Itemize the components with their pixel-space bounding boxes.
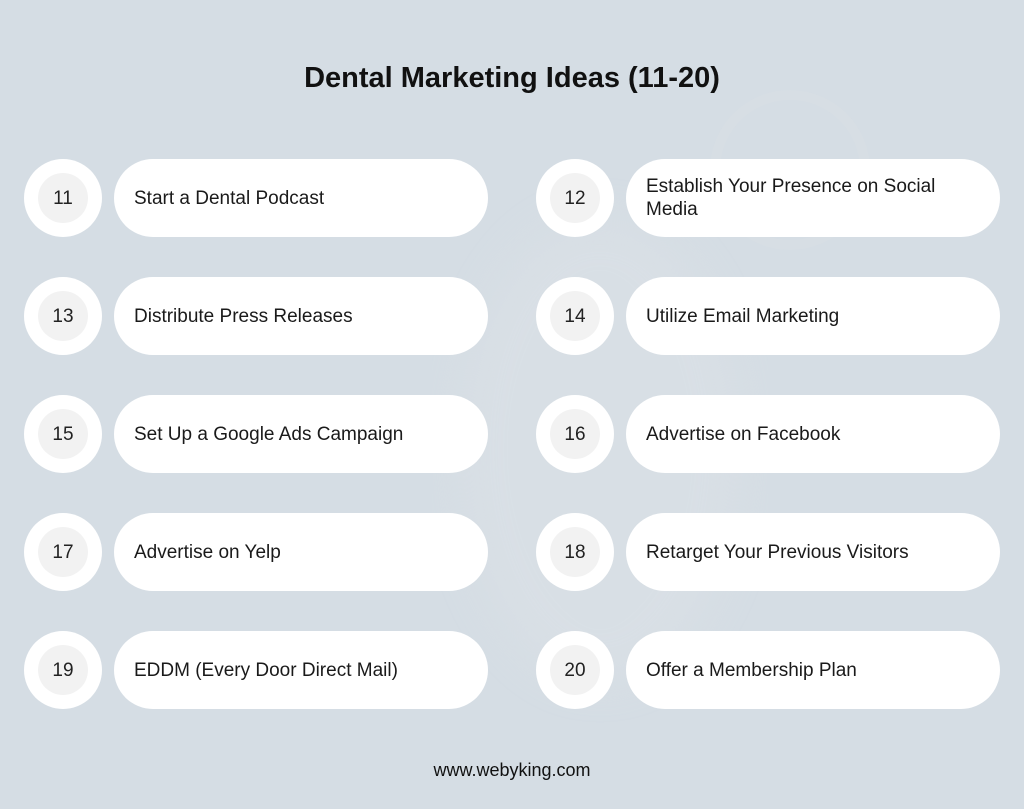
item 12: 12 [564, 188, 586, 209]
item 19 [24, 631, 488, 709]
item 16: 16 [564, 424, 586, 445]
title: Dental Marketing Ideas (11-20) [304, 62, 720, 94]
footer url: www.webyking.com [433, 760, 591, 780]
item 16: Advertise on Facebook [646, 424, 840, 444]
item 15 [24, 395, 488, 473]
item 17 [24, 513, 488, 591]
item 13 [24, 277, 488, 355]
item 11 [24, 159, 488, 237]
item 14: 14 [564, 306, 586, 327]
item 20 [536, 631, 1000, 709]
item 12 [536, 159, 1000, 237]
item 15: 15 [52, 424, 74, 445]
item 11: Start a Dental Podcast [134, 188, 324, 208]
item 18: 18 [564, 542, 586, 563]
item 20: 20 [564, 660, 586, 681]
item 19: EDDM (Every Door Direct Mail) [134, 660, 398, 680]
item 18: Retarget Your Previous Visitors [646, 542, 909, 562]
item 17: 17 [52, 542, 74, 563]
item 20: Offer a Membership Plan [646, 660, 857, 680]
item 12: Establish Your Presence on Social Media [646, 176, 935, 220]
item 14 [536, 277, 1000, 355]
item 19: 19 [52, 660, 74, 681]
item 14: Utilize Email Marketing [646, 306, 839, 326]
item 15: Set Up a Google Ads Campaign [134, 424, 403, 444]
item 18 [536, 513, 1000, 591]
item 17: Advertise on Yelp [134, 542, 281, 562]
item 13: Distribute Press Releases [134, 306, 353, 326]
item 16 [536, 395, 1000, 473]
item 11: 11 [53, 188, 73, 209]
item 13: 13 [52, 306, 74, 327]
